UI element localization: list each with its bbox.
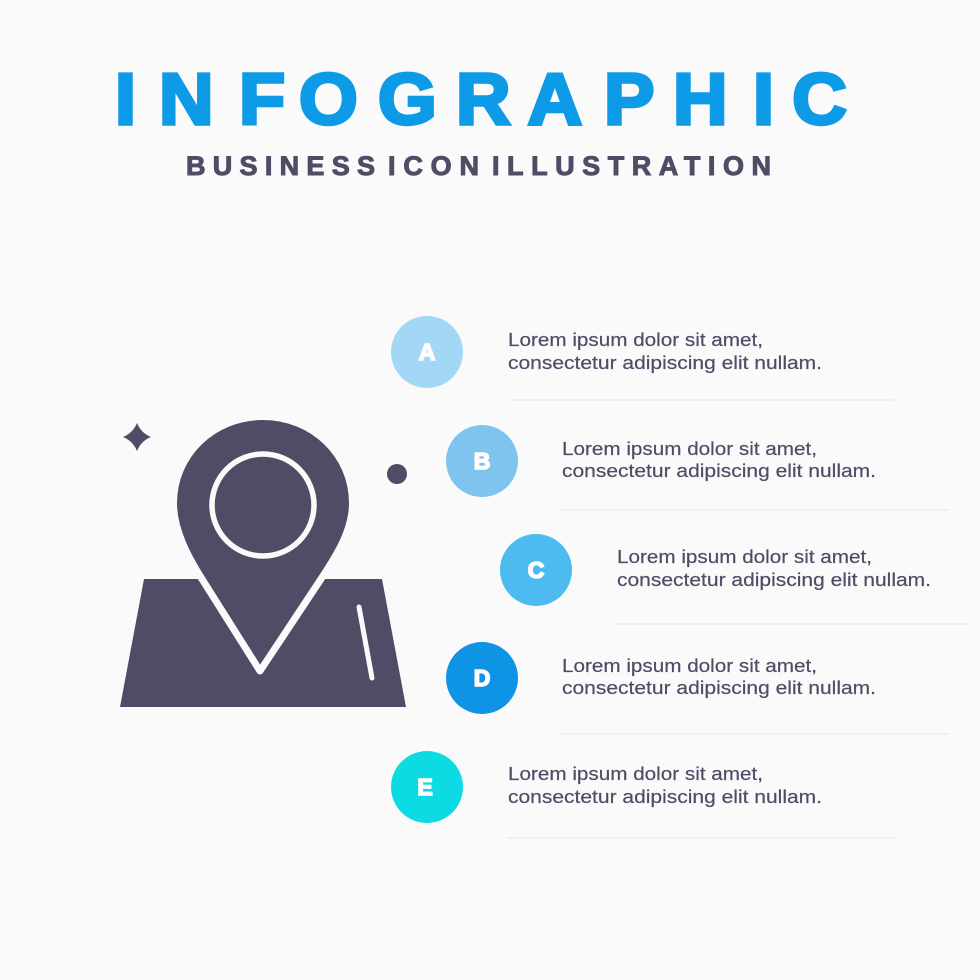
icon: location pin [174, 416, 352, 671]
letter C: C [528, 557, 544, 583]
icon: dot [387, 464, 407, 484]
step A [391, 316, 895, 400]
text E: Lorem ipsum dolor sit amet, [508, 763, 763, 784]
letter E: E [417, 774, 433, 800]
text B: consectetur adipiscing elit nullam. [562, 460, 876, 481]
step D [446, 642, 949, 734]
badge E [391, 751, 463, 823]
text E [508, 763, 822, 807]
icon: map base [120, 579, 406, 707]
icon: map with location pin [120, 416, 406, 707]
step B [446, 425, 949, 510]
text B: Lorem ipsum dolor sit amet, [562, 438, 817, 459]
text C [617, 546, 931, 590]
icon: pin ring [212, 454, 314, 556]
step E [391, 751, 895, 838]
icon: sparkle star [123, 423, 151, 451]
badge C [500, 534, 572, 606]
text A: Lorem ipsum dolor sit amet, [508, 329, 763, 350]
text A: consectetur adipiscing elit nullam. [508, 352, 822, 373]
text E: consectetur adipiscing elit nullam. [508, 786, 822, 807]
icon: map fold line [359, 607, 372, 678]
text C: consectetur adipiscing elit nullam. [617, 569, 931, 590]
letter B: B [474, 448, 490, 474]
text D: consectetur adipiscing elit nullam. [562, 677, 876, 698]
subtitle: ILLUSTRATION [492, 151, 771, 181]
subtitle [186, 151, 771, 181]
badge B [446, 425, 518, 497]
title: INFOGRAPHIC [115, 59, 847, 140]
step C [500, 534, 972, 624]
letter D: D [474, 665, 490, 691]
letter A: A [419, 339, 435, 365]
subtitle: BUSINESS [186, 151, 375, 181]
text A [508, 329, 822, 373]
badge D [446, 642, 518, 714]
text C: Lorem ipsum dolor sit amet, [617, 546, 872, 567]
badge A [391, 316, 463, 388]
text D [562, 655, 876, 698]
text D: Lorem ipsum dolor sit amet, [562, 655, 817, 676]
subtitle: ICON [388, 151, 479, 181]
text B [562, 438, 876, 481]
